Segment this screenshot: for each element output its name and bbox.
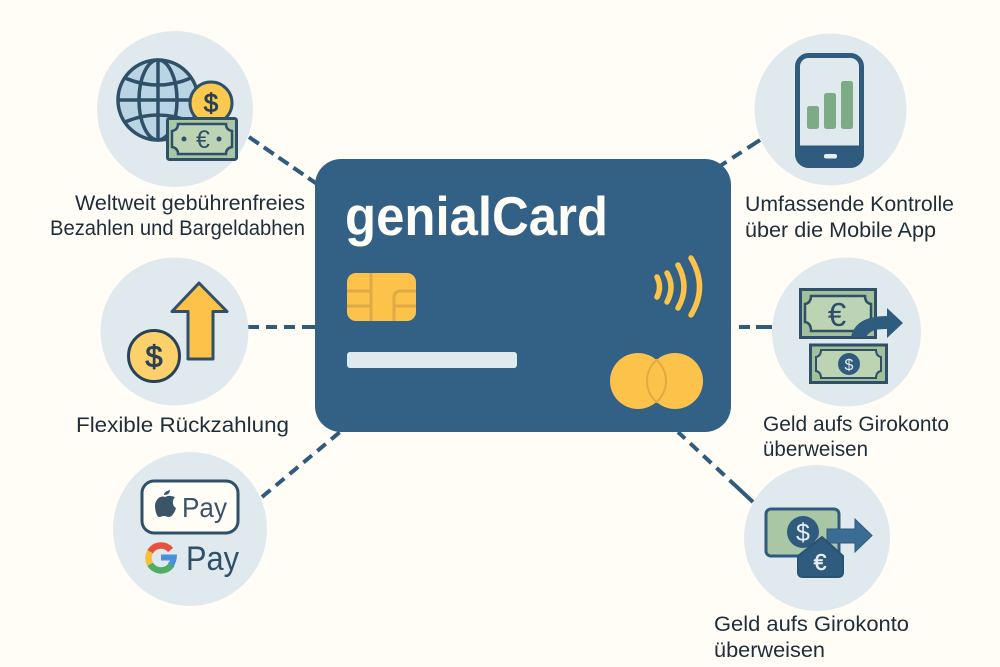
connector: middle left [248,325,316,329]
icon: euro banknote: € [828,296,846,333]
connector: bottom left [262,432,340,497]
icon: dollar coin [128,330,180,382]
bar chart [807,81,853,129]
magnetic strip [347,352,517,368]
label: worldwide payment [50,192,305,240]
icon: globe [118,60,198,140]
connector: top left [249,137,317,184]
icon: up arrow [172,283,227,359]
connector: bottom right [678,432,753,502]
icon: dollar coin: $ [204,88,219,118]
icon: transfer arrow [827,519,872,552]
panel: transfer to current account 2 [714,465,909,662]
label: transfer to current account [763,413,949,461]
label: worldwide payment: Bezahlen und Bargeldabhen [50,217,305,240]
icon: Apple Pay: Pay [182,492,227,523]
card title: genialCard [345,185,608,247]
icon: dollar banknote: $ [845,357,854,374]
panel: worldwide payment [50,31,305,240]
label: transfer to current account: überweisen [763,438,868,461]
label: transfer to current account 2: Geld aufs Girokonto [714,613,909,636]
label: transfer to current account: Geld aufs Girokonto [763,413,949,436]
icon: euro tag: € [814,549,827,575]
connector: middle right [738,325,772,329]
icon: dollar coin [190,82,232,124]
icon: Google Pay [149,540,239,578]
panel: flexible repayment [76,258,289,437]
label: worldwide payment: Weltweit gebührenfreies [75,192,305,215]
icon: banknote with coin: $ [796,519,810,547]
label: mobile app control: Umfassende Kontrolle [745,193,954,216]
label: mobile app control [745,193,954,242]
icon: banknote with coin [766,509,839,556]
icon: euro banknote [800,290,876,338]
icon: dollar coin: $ [145,339,163,374]
panel: credit card [315,159,731,432]
icon: euro banknote: € [196,126,210,154]
icon: Apple Pay [142,481,238,533]
icon: card network circles [610,353,703,409]
icon: euro banknote [168,118,236,160]
icon: transfer arrow [851,308,903,338]
connector: top right [720,140,760,166]
icon: euro tag [798,537,843,577]
panel: mobile wallets [113,452,267,606]
label: transfer to current account 2 [714,613,909,662]
icon: chip [347,273,416,321]
icon: dollar banknote [810,345,886,382]
label: transfer to current account 2: überweisen [714,639,825,662]
panel: mobile app control [745,34,954,242]
icon: smartphone [798,56,862,166]
label: mobile app control: über die Mobile App [745,219,936,242]
label: flexible repayment: Flexible Rückzahlung [76,414,289,437]
panel: transfer to current account [763,258,949,461]
icon: contactless waves [657,258,700,315]
icon: Google Pay: Pay [186,540,239,578]
